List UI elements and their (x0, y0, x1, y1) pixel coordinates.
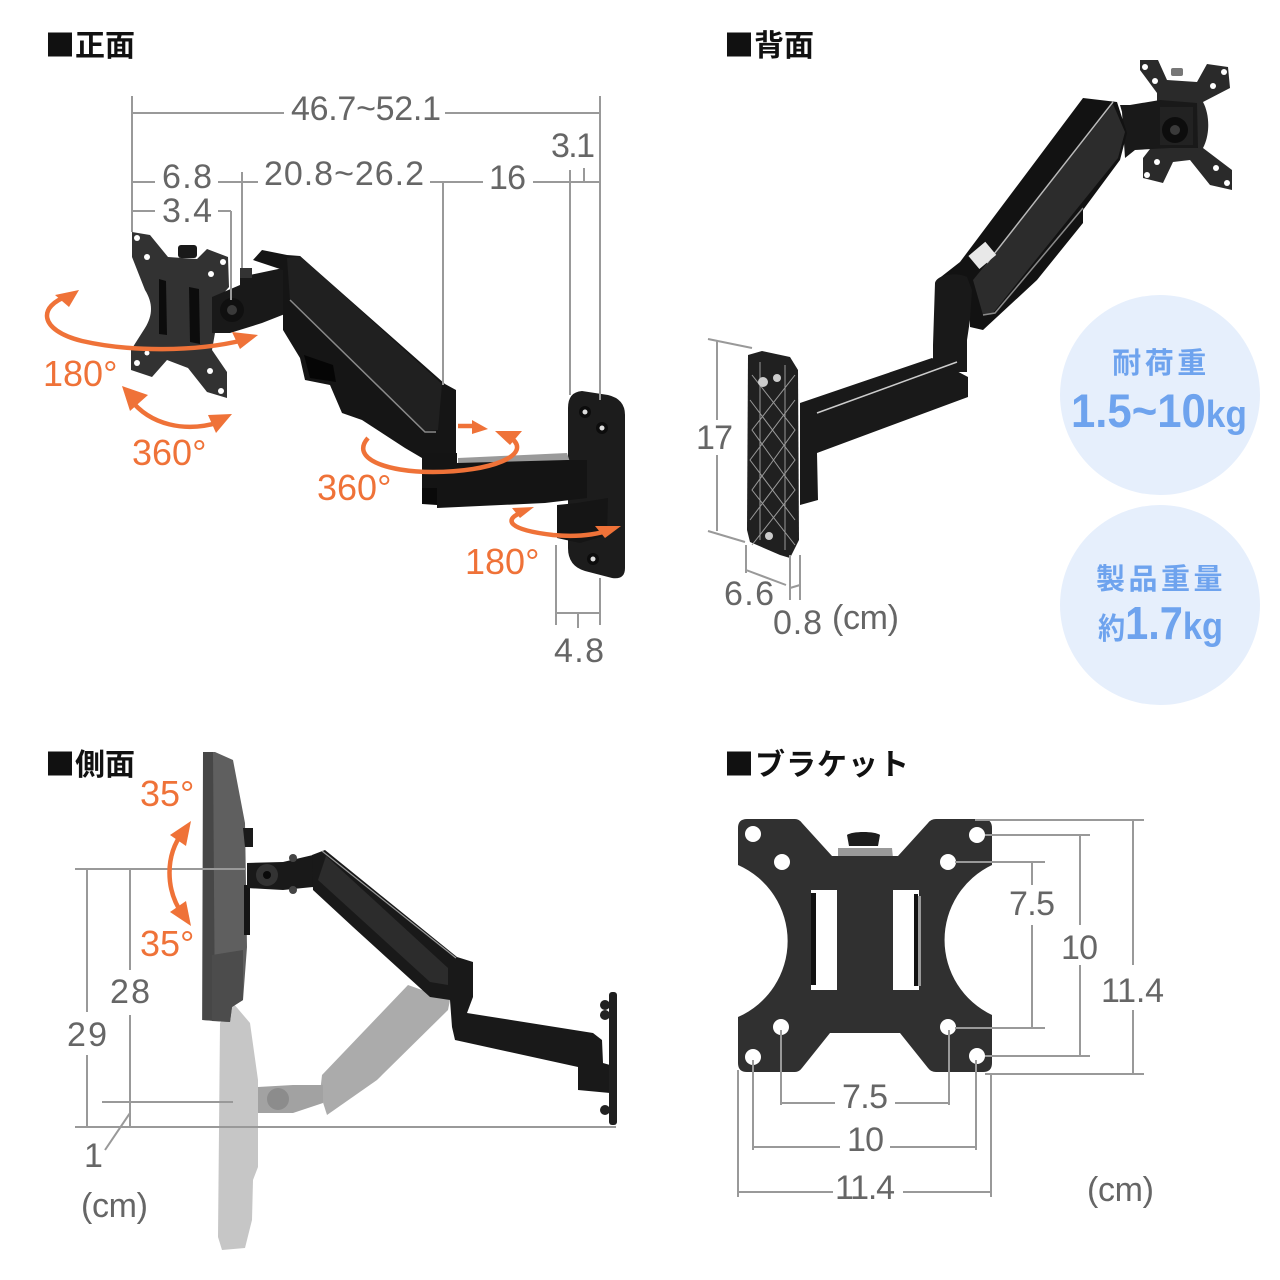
dimension: 3.1: 3.1 (551, 127, 595, 165)
dimension: 16: 16 (489, 159, 526, 197)
dimension: 0.8: 0.8 (773, 604, 822, 642)
label: 180 degrees: 180° (465, 541, 539, 582)
dimension: 11.4 vertical: 11.4 (1101, 972, 1164, 1010)
heading: bracket: ■ブラケット (724, 740, 910, 784)
product: bracket plate (738, 819, 992, 1072)
dimension: 6.6: 6.6 (724, 575, 774, 613)
dimension: 17: 17 (696, 419, 733, 457)
dimension lines: bracket (738, 820, 1144, 1197)
arrow: 360 degree monitor rotation (122, 386, 232, 433)
label: tilt down 35 degrees: 35° (140, 923, 194, 964)
dimension: 11.4 horizontal: 11.4 (835, 1169, 895, 1207)
callout: load capacity: 耐荷重 (1112, 347, 1210, 380)
unit: cm: (cm) (81, 1187, 148, 1225)
panel: front view (43, 21, 625, 670)
arrow: 180 degree wall swivel (512, 507, 621, 538)
dimension: 10 vertical: 10 (1061, 929, 1098, 967)
dimension: 3.4: 3.4 (162, 192, 212, 230)
dimension: 10 horizontal: 10 (847, 1121, 884, 1159)
callout: product weight (1060, 505, 1260, 705)
dimension: 7.5 horizontal: 7.5 (842, 1078, 888, 1116)
product: back arm (747, 60, 1232, 558)
product: faded lowered arm (218, 985, 450, 1250)
panel: back view (696, 21, 1260, 705)
heading: back: ■背面 (724, 21, 814, 65)
label: tilt up 35 degrees: 35° (140, 773, 194, 814)
callout: load capacity (1060, 295, 1260, 495)
dimension: 4.8: 4.8 (554, 632, 604, 670)
arrow: 180 degree monitor swivel (47, 290, 258, 349)
unit: cm: (cm) (1087, 1171, 1154, 1209)
arrow: tilt range (170, 821, 191, 926)
product: front arm (131, 232, 625, 578)
dimension: 20.8~26.2: 20.8~26.2 (264, 155, 424, 193)
dimension: 6.8: 6.8 (162, 158, 212, 196)
label: 360 degrees: 360° (132, 432, 206, 473)
callout: product weight: 製品重量 (1096, 563, 1226, 596)
arrow: 360 degree arm swivel (363, 420, 522, 472)
callout: load capacity: 1.5~10kg (1071, 384, 1247, 437)
heading: side: ■側面 (45, 740, 135, 784)
dimension lines: front (132, 96, 600, 628)
panel: side view (45, 740, 617, 1250)
dimension: 28: 28 (110, 973, 150, 1011)
dimension: 29: 29 (67, 1016, 107, 1054)
dimension: 46.7~52.1: 46.7~52.1 (291, 90, 441, 128)
dimension lines: side (75, 869, 616, 1150)
callout: product weight: 約1.7kg (1098, 597, 1223, 649)
dimension: 7.5 vertical: 7.5 (1009, 885, 1055, 923)
label: 360 degrees: 360° (317, 467, 391, 508)
label: 180 degrees: 180° (43, 353, 117, 394)
dimension: 1: 1 (84, 1137, 103, 1175)
heading: front: ■正面 (45, 21, 135, 65)
product: side arm with monitor (202, 752, 617, 1125)
unit: cm: (cm) (832, 599, 899, 637)
dimension lines: back (708, 339, 800, 600)
panel: bracket (724, 740, 1164, 1209)
